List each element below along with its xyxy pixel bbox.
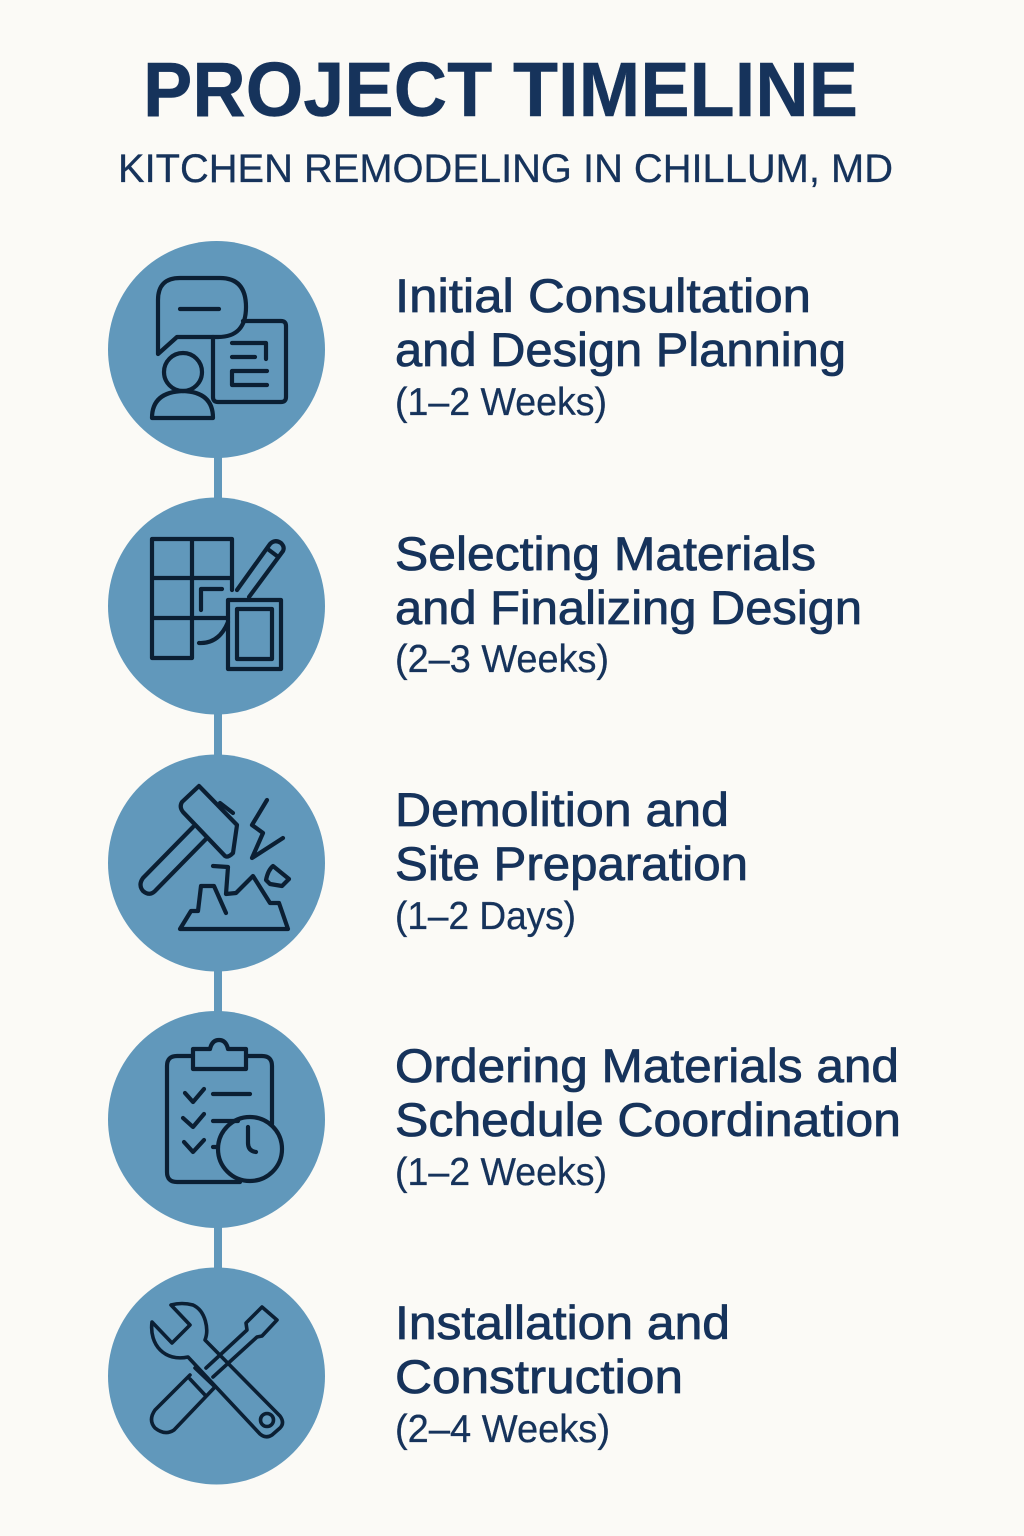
icon: speech bubble, document and person — [152, 278, 286, 418]
title: PROJECT TIMELINE — [143, 47, 858, 133]
step 1 text — [395, 269, 846, 424]
step 5 text: Construction — [395, 1350, 683, 1403]
step 4 text: Schedule Coordination — [395, 1093, 901, 1146]
step 5 text: (2–4 Weeks) — [395, 1408, 610, 1451]
step 4 circle — [108, 1011, 325, 1228]
step 4 text: (1–2 Weeks) — [395, 1151, 607, 1194]
step 4: ordering materials — [108, 1011, 901, 1228]
step 3 text: Site Preparation — [395, 837, 748, 890]
step 2: selecting materials — [108, 498, 862, 714]
timeline connector line — [214, 450, 222, 1280]
step 1 text: (1–2 Weeks) — [395, 381, 607, 424]
step 3 text — [395, 783, 748, 938]
step 4 text: Ordering Materials and — [395, 1039, 899, 1092]
step 5: installation — [108, 1268, 730, 1484]
step 1 text: Initial Consultation — [395, 269, 811, 322]
step 2 text: Selecting Materials — [395, 527, 816, 580]
step 1: initial consultation — [108, 241, 846, 458]
step 5 text: Installation and — [395, 1296, 730, 1349]
subtitle: KITCHEN REMODELING IN CHILLUM, MD — [118, 147, 893, 191]
step 3 text: Demolition and — [395, 783, 729, 836]
step 2 circle — [108, 498, 325, 714]
step 4 text — [395, 1039, 901, 1194]
step 1 circle — [108, 241, 325, 458]
icon: hammer and rubble — [140, 786, 289, 929]
step 2 text: (2–3 Weeks) — [395, 638, 609, 681]
step 3: demolition — [108, 754, 748, 972]
step 3 circle — [108, 754, 325, 972]
step 3 text: (1–2 Days) — [395, 895, 576, 938]
step 1 text: and Design Planning — [395, 323, 846, 376]
step 2 text: and Finalizing Design — [395, 581, 862, 634]
step 5 circle — [108, 1268, 325, 1484]
icon: clipboard checklist and clock — [167, 1040, 282, 1182]
step 5 text — [395, 1296, 730, 1451]
step 2 text — [395, 527, 862, 681]
icon: tile grid, pencil and sample — [152, 539, 284, 669]
icon: crossed wrench and screwdriver — [152, 1304, 282, 1437]
